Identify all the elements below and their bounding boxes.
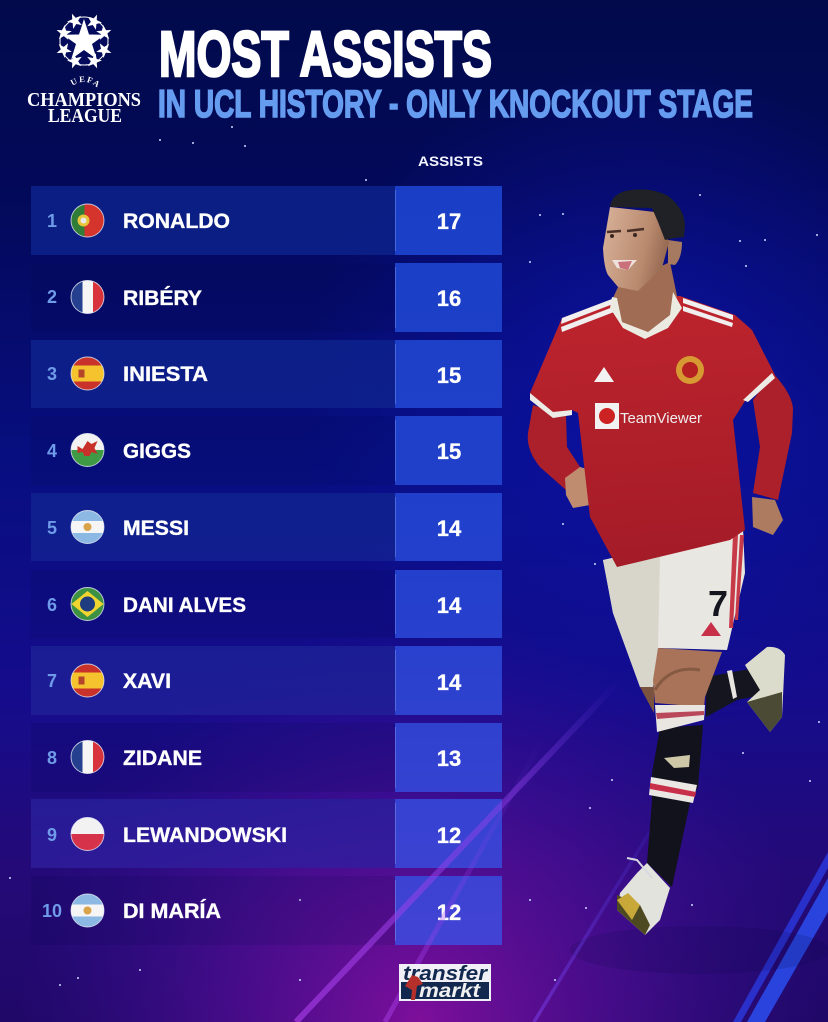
light beams xyxy=(296,680,660,1022)
flag: France xyxy=(70,740,105,774)
row 5: Messi xyxy=(31,493,502,561)
left arm xyxy=(528,405,601,508)
row 10: Di María: 12 xyxy=(437,900,461,925)
text: UEFA: UEFA xyxy=(70,76,98,88)
row 1: Ronaldo: 17 xyxy=(437,209,461,234)
row 1: Ronaldo: 1 xyxy=(47,211,57,231)
row 8: Zidane xyxy=(31,723,502,792)
flag: Poland xyxy=(70,817,104,851)
text: League: LEAGUE xyxy=(48,105,122,127)
row 6: Dani Alves: 14 xyxy=(437,593,462,618)
flag: Spain xyxy=(70,356,104,390)
row 5: Messi: MESSI xyxy=(123,517,189,540)
shorts xyxy=(603,528,745,687)
row 9: Lewandowski: LEWANDOWSKI xyxy=(123,824,287,847)
row 8: Zidane: 8 xyxy=(47,748,57,768)
row 10: Di María: DI MARÍA xyxy=(123,900,221,923)
right arm xyxy=(752,373,793,535)
flag: Argentina xyxy=(70,510,104,544)
player illustration xyxy=(528,189,793,935)
row 3: Iniesta: INIESTA xyxy=(123,363,208,386)
row 9: Lewandowski xyxy=(31,799,502,868)
row 3: Iniesta xyxy=(31,340,502,408)
row 6: Dani Alves: DANI ALVES xyxy=(123,594,246,617)
row 10: Di María xyxy=(31,876,502,945)
title: MOST ASSISTS xyxy=(159,18,492,90)
row 9: Lewandowski: 9 xyxy=(47,825,57,845)
row 6: Dani Alves xyxy=(31,570,502,638)
column heading: assists: ASSISTS xyxy=(418,153,483,169)
row 3: Iniesta: 3 xyxy=(47,364,57,384)
flag: Wales xyxy=(70,433,104,467)
icon: starball xyxy=(54,11,114,71)
row 4: Giggs: 4 xyxy=(47,441,57,461)
row 7: Xavi: XAVI xyxy=(123,670,171,693)
row 4: Giggs xyxy=(31,416,502,485)
row 10: Di María: 10 xyxy=(42,901,62,921)
logo: Transfermarkt: markt xyxy=(419,981,481,1002)
panel: ranking table xyxy=(31,186,502,945)
logo: UEFA Champions League xyxy=(27,14,141,127)
row 9: Lewandowski: 12 xyxy=(437,823,461,848)
row 6: Dani Alves: 6 xyxy=(47,595,57,615)
front boot xyxy=(617,858,670,935)
row 1: Ronaldo: RONALDO xyxy=(123,210,230,233)
text: Champions: CHAMPIONS xyxy=(27,89,141,111)
row 7: Xavi xyxy=(31,646,502,715)
shorts: 7 xyxy=(708,583,728,624)
logo: Transfermarkt xyxy=(399,963,491,1002)
flag: Argentina xyxy=(70,894,104,928)
back leg xyxy=(640,647,785,732)
row 3: Iniesta: 15 xyxy=(437,363,461,388)
row 7: Xavi: 14 xyxy=(437,670,462,695)
row 2: Ribéry: 2 xyxy=(47,287,57,307)
row 2: Ribéry: RIBÉRY xyxy=(123,287,202,310)
jersey: TeamViewer xyxy=(620,410,702,427)
row 5: Messi: 14 xyxy=(437,516,462,541)
flag: France xyxy=(70,280,105,314)
logo: Transfermarkt: transfer xyxy=(403,963,488,985)
front leg xyxy=(647,648,722,887)
row 2: Ribéry xyxy=(31,263,502,332)
row 2: Ribéry: 16 xyxy=(437,286,461,311)
row 1: Ronaldo xyxy=(31,186,502,255)
flag: Spain xyxy=(70,664,104,698)
row 8: Zidane: 13 xyxy=(437,746,461,771)
row 7: Xavi: 7 xyxy=(47,671,57,691)
row 5: Messi: 5 xyxy=(47,518,57,538)
flag: Brazil xyxy=(70,587,104,621)
row 4: Giggs: 15 xyxy=(437,439,461,464)
row 4: Giggs: GIGGS xyxy=(123,440,191,463)
flag: Portugal xyxy=(70,204,104,238)
row 8: Zidane: ZIDANE xyxy=(123,747,202,770)
jersey xyxy=(530,296,775,567)
head xyxy=(603,189,685,339)
